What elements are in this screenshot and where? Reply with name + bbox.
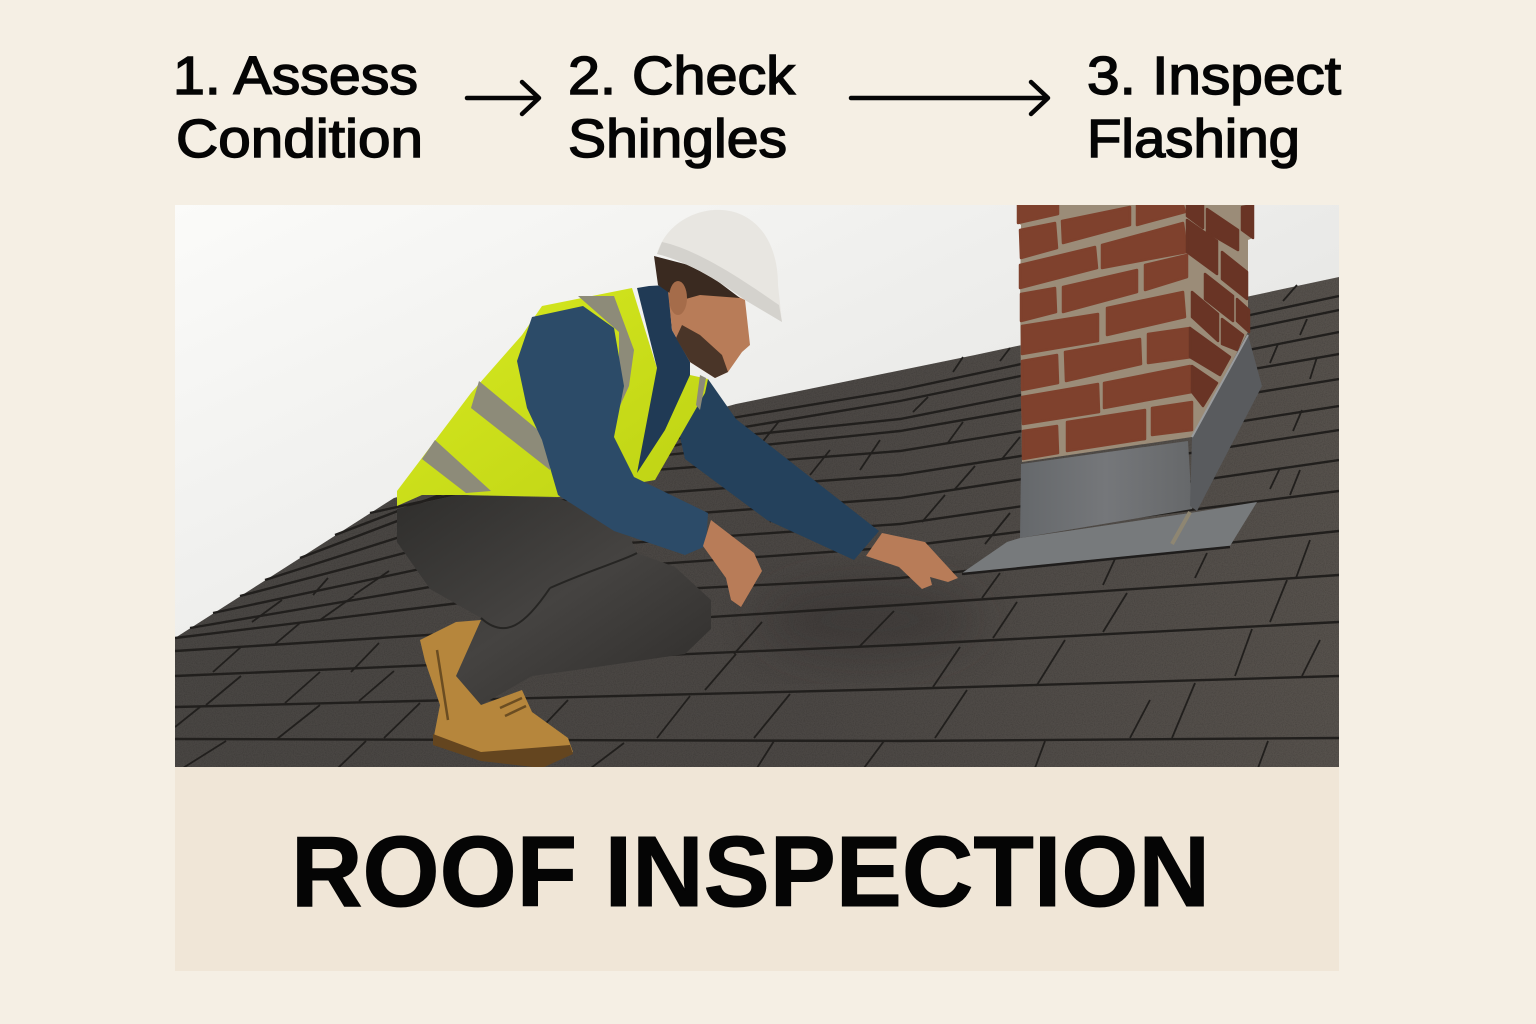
step 2 heading: check shingles — [568, 46, 796, 169]
step 3 heading: inspect flashing: 3. Inspect — [1087, 46, 1341, 106]
step 1 heading: assess condition: 1. Assess — [173, 46, 418, 106]
vest reflective strips — [422, 296, 706, 493]
roof inspector — [397, 210, 958, 768]
trousers — [397, 495, 711, 705]
near hand — [703, 520, 762, 607]
arrow: step 1 to step 2 — [467, 82, 539, 114]
step 2 heading: check shingles: Shingles — [568, 109, 787, 169]
ear — [669, 281, 687, 315]
boot sole and laces — [433, 734, 573, 768]
far hand — [866, 533, 958, 589]
step 3 heading: inspect flashing — [1087, 46, 1341, 169]
step 1 heading: assess condition — [173, 46, 423, 169]
near sleeve — [517, 306, 708, 555]
photo panel: roof inspection scene — [175, 205, 1339, 770]
brick chimney — [1018, 205, 1253, 462]
sky backdrop — [175, 205, 1339, 636]
hard hat — [657, 210, 782, 322]
work boot — [420, 620, 573, 768]
safety vest — [397, 288, 708, 506]
hair — [654, 256, 740, 300]
title: roof inspection: ROOF INSPECTION — [291, 816, 1210, 928]
beard — [676, 325, 728, 378]
face — [668, 292, 750, 378]
metal flashing — [962, 335, 1262, 574]
step 3 heading: inspect flashing: Flashing — [1087, 109, 1300, 169]
step 1 heading: assess condition: Condition — [176, 109, 423, 169]
arrow: step 2 to step 3 — [851, 82, 1048, 114]
step 2 heading: check shingles: 2. Check — [568, 46, 796, 106]
far arm — [680, 379, 879, 560]
collar and chest shirt — [637, 285, 690, 473]
shingled roof — [175, 270, 1339, 770]
title band — [175, 767, 1339, 971]
